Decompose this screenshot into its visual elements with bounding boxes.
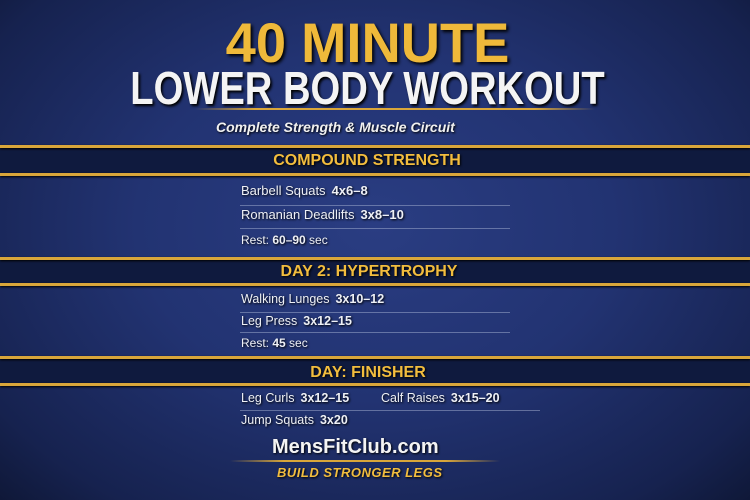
band: finisher [0,358,750,384]
band: compound strength [0,147,750,174]
list: hypertrophy: Walking Lunges 3x10–12 [241,292,384,306]
list: hypertrophy: Rest: 45 sec [241,336,308,350]
list: compound strength: Romanian Deadlifts 3x8–10 [241,207,404,222]
footer underline [230,460,500,462]
list: finisher: Jump Squats 3x20 [241,413,348,427]
list: hypertrophy: Leg Press 3x12–15 [241,314,352,328]
list: finisher: Calf Raises 3x15–20 [381,391,500,405]
heading: finisher: DAY: FINISHER [310,364,426,381]
heading: day 2 hypertrophy: DAY 2: HYPERTROPHY [281,263,457,280]
website: MensFitClub.com [272,436,439,458]
list: compound strength: Barbell Squats 4x6–8 [241,183,368,198]
list: compound strength [240,183,510,247]
list: finisher [240,391,540,428]
title underline [195,108,595,110]
list: finisher: Leg Curls 3x12–15 [241,391,349,405]
list: hypertrophy [240,292,510,350]
subtitle: Complete Strength & Muscle Circuit [216,119,455,135]
title: 40 minute: 40 MINUTE [226,11,509,74]
tagline: BUILD STRONGER LEGS [277,465,443,480]
band: day 2 hypertrophy [0,259,750,284]
heading: compound strength: COMPOUND STRENGTH [273,152,461,169]
list: compound strength: Rest: 60–90 sec [241,233,328,247]
title: lower body workout: LOWER BODY WORKOUT [130,62,605,114]
